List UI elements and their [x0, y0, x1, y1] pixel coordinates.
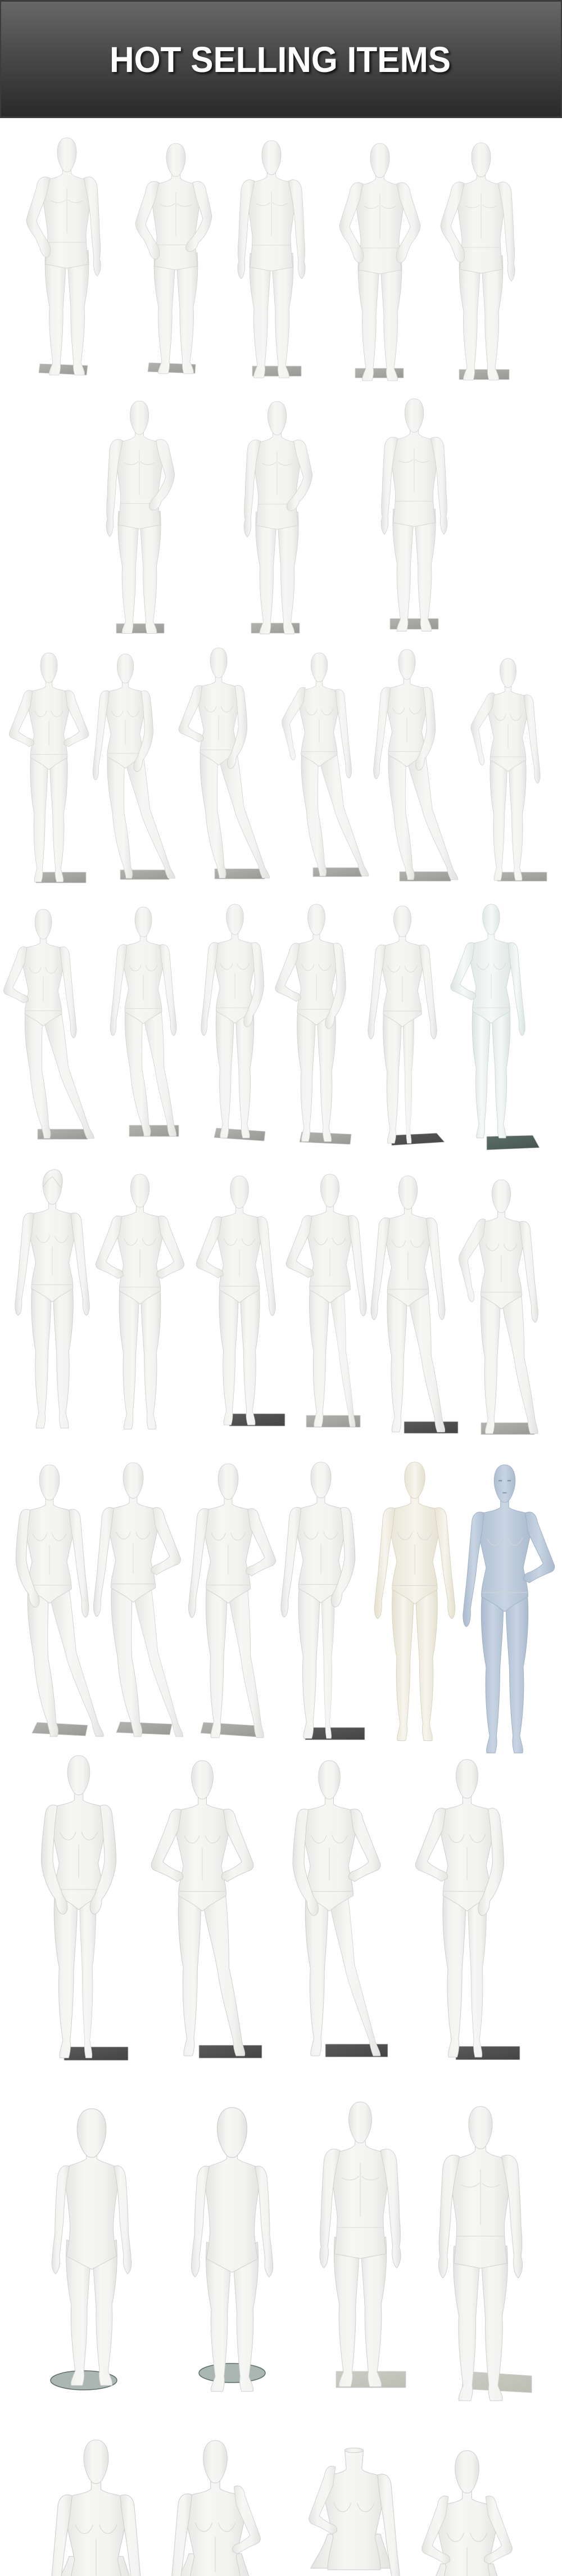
mannequin 3-1: [9, 653, 89, 883]
mannequin 8-1 round base: [51, 2109, 132, 2390]
mannequin 5-2: [96, 1174, 184, 1429]
mannequin 9-1: [48, 2440, 144, 2576]
mannequin 3-6: [471, 658, 547, 881]
mannequin 1-2: [135, 143, 212, 373]
mannequin 4-5: [368, 906, 445, 1145]
mannequin 6-6 blue: [463, 1465, 555, 1753]
mannequin 8-2 round base: [191, 2108, 273, 2392]
title: HOT SELLING ITEMS: [110, 39, 451, 80]
mannequin 5-6: [459, 1180, 538, 1434]
mannequin 1-4: [339, 143, 420, 381]
row 6: female mannequins: [16, 1462, 555, 1753]
row 9: seated mannequins, cut off at page bottom: [48, 2440, 512, 2576]
mannequin 9-3 headless: [309, 2448, 401, 2576]
mannequin 3-3: [179, 648, 270, 879]
mannequin 7-3: [293, 1761, 388, 2057]
mannequin 2-1: [106, 401, 175, 634]
mannequin 4-1: [3, 909, 94, 1139]
mannequin 7-2: [151, 1761, 262, 2058]
mannequin 4-3: [201, 904, 265, 1141]
row 4: female mannequins: [3, 904, 540, 1150]
mannequin 5-3: [196, 1176, 285, 1426]
mannequin 1-5: [441, 143, 515, 380]
mannequin 4-2: [110, 907, 179, 1136]
row 7: female mannequins, large: [41, 1756, 520, 2060]
mannequin 6-1: [16, 1465, 103, 1736]
mannequin 5-4: [286, 1174, 366, 1427]
mannequin 1-3: [238, 141, 305, 378]
row 8: child mannequins: [51, 2102, 532, 2401]
row 2: male mannequins: [106, 399, 447, 634]
header banner: [0, 0, 562, 118]
mannequin 9-4: [422, 2451, 512, 2576]
mannequin 6-2: [93, 1463, 183, 1736]
row 1: male mannequins: [26, 138, 515, 381]
mannequin 9-2: [168, 2440, 260, 2576]
mannequin 1-1: [26, 138, 101, 375]
mannequin 6-5 cream: [374, 1462, 455, 1741]
mannequin 7-1: [41, 1756, 128, 2060]
mannequin 8-3: [320, 2102, 406, 2388]
mannequin 5-1 with hair: [15, 1170, 89, 1428]
mannequin 2-3: [381, 399, 447, 631]
mannequin 8-4: [438, 2106, 532, 2401]
mannequin 6-3: [188, 1464, 275, 1738]
mannequin 4-4: [275, 904, 351, 1144]
mannequin 7-4: [415, 1760, 520, 2060]
mannequin 3-4: [282, 653, 369, 877]
mannequin 5-5: [371, 1176, 458, 1433]
row 5: female mannequins: [15, 1170, 538, 1434]
row 3: female mannequins: [9, 648, 547, 883]
mannequin 2-2: [244, 401, 312, 634]
mannequin 6-4: [281, 1462, 365, 1740]
mannequin 4-6: [451, 904, 540, 1150]
mannequin 3-2: [93, 654, 175, 879]
mannequin 3-5: [374, 649, 458, 881]
